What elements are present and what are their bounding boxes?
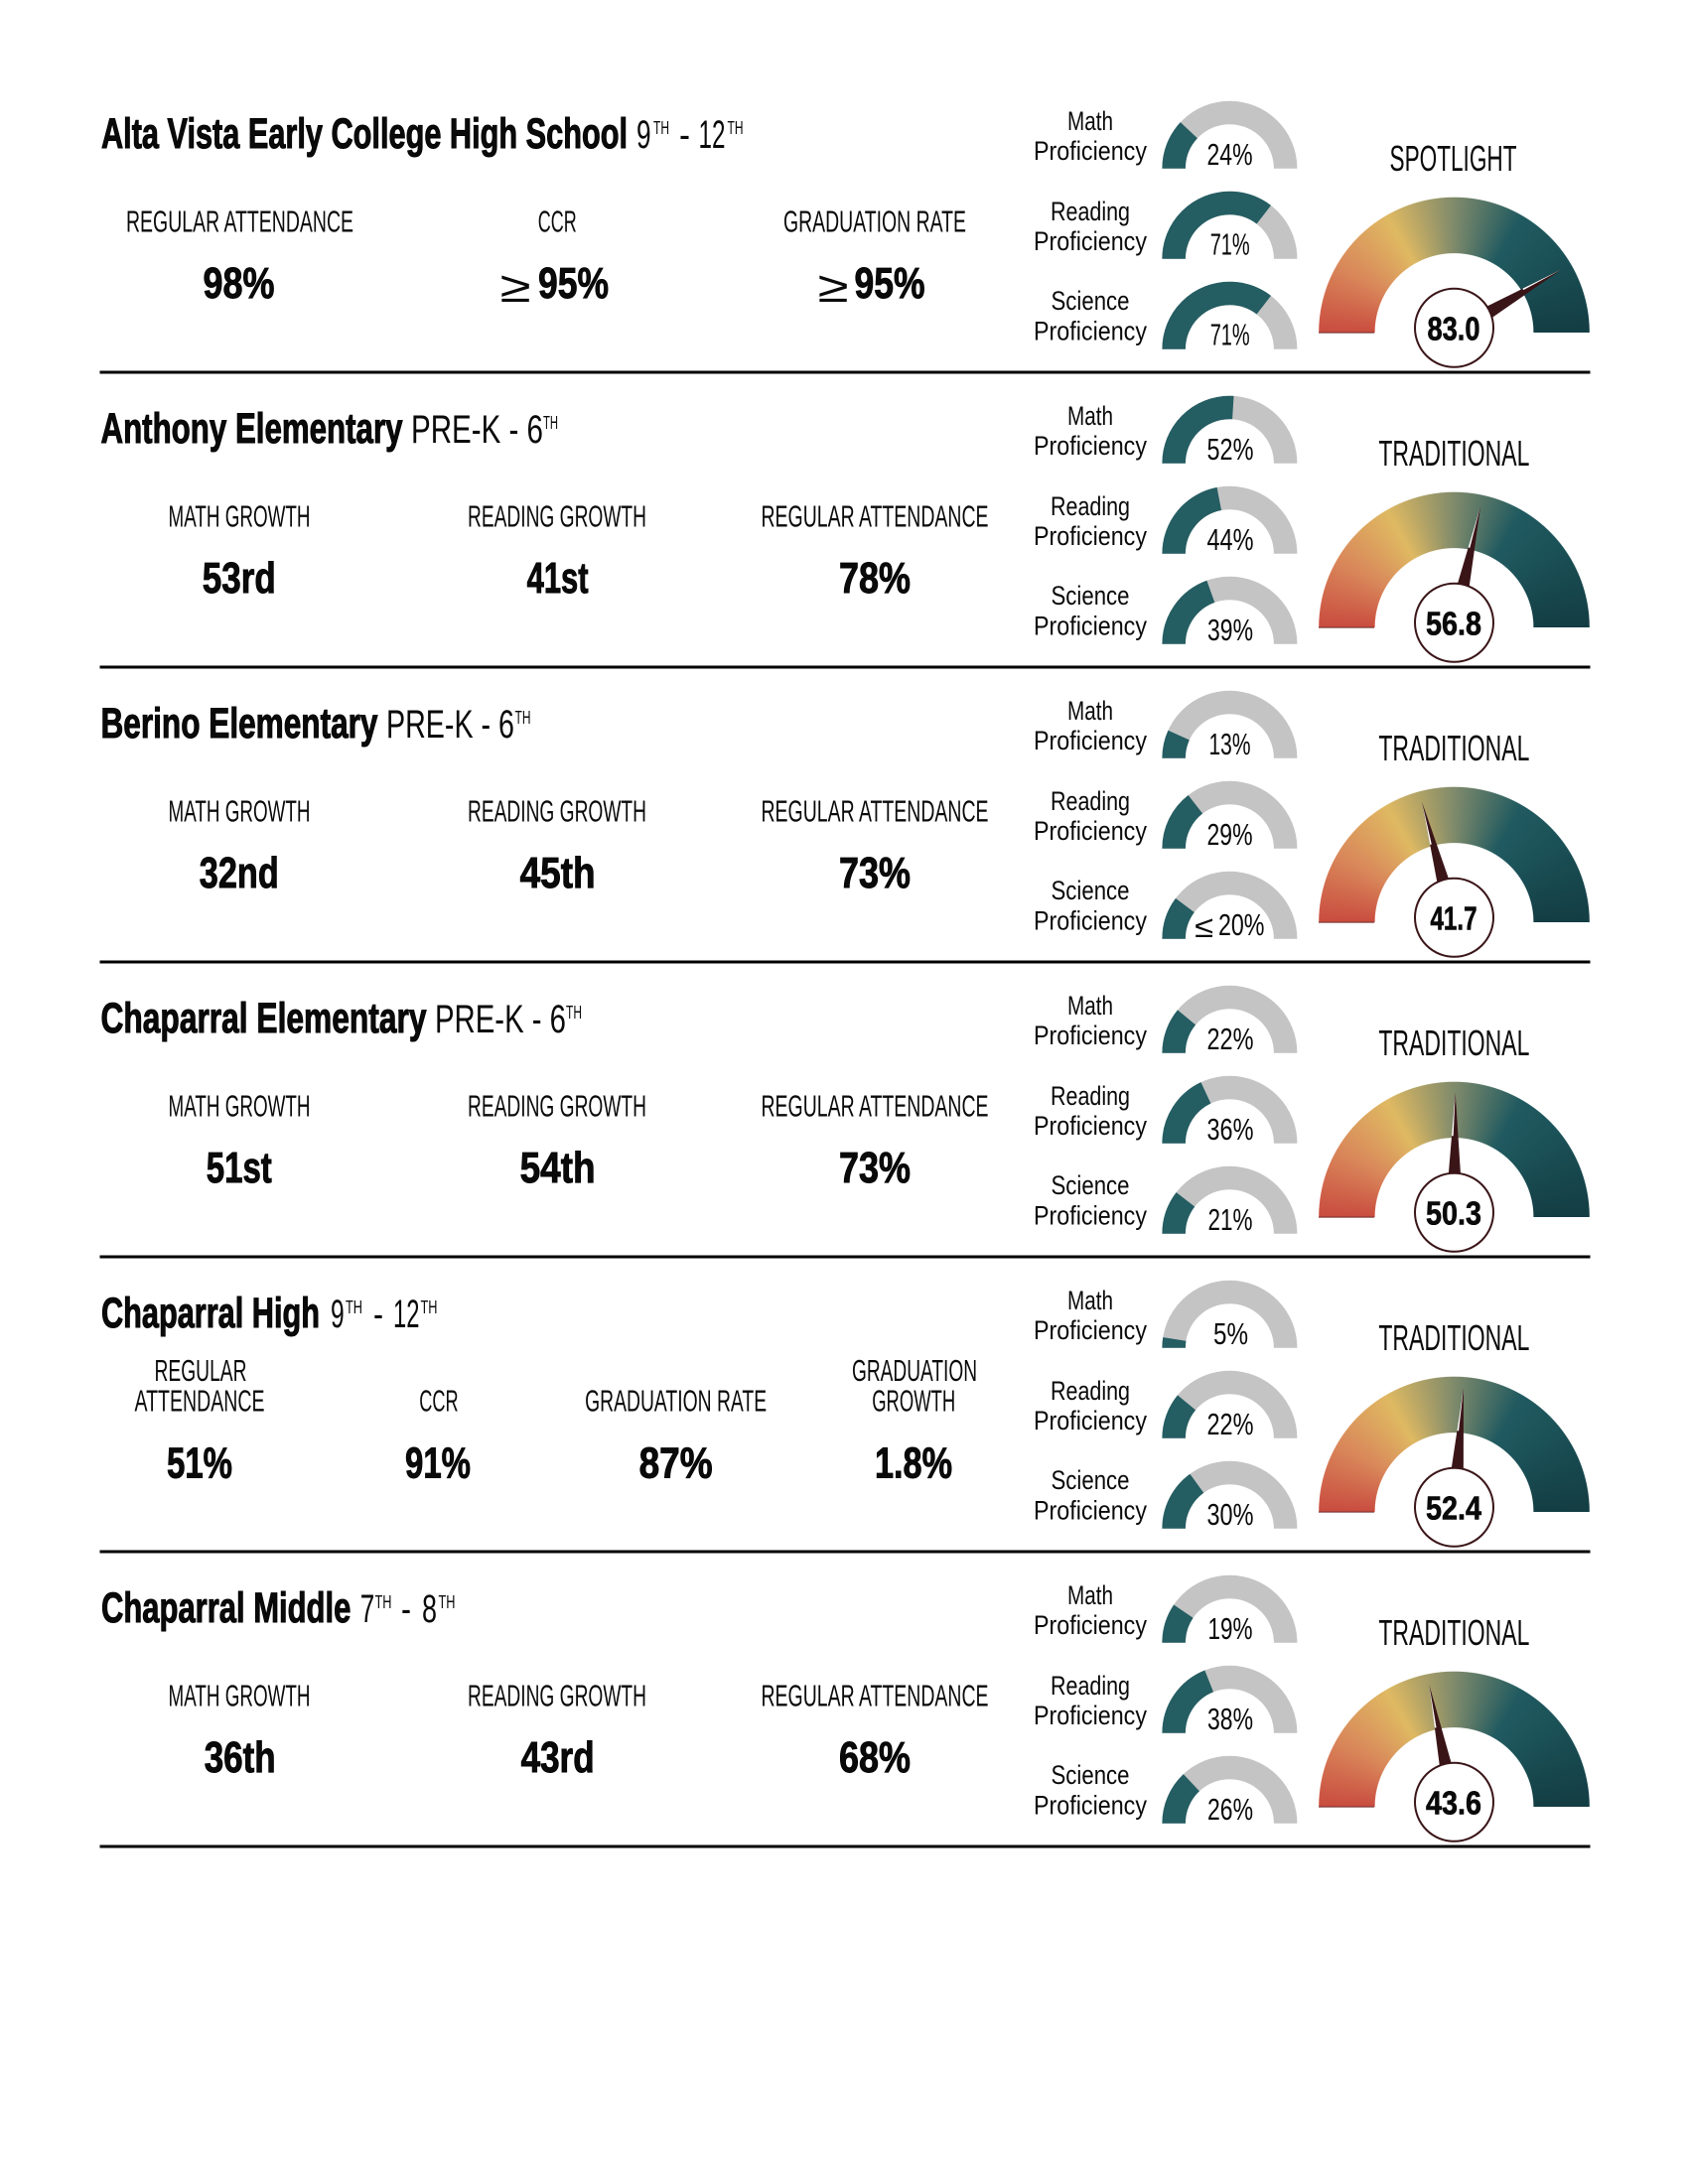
needle xyxy=(1483,264,1565,320)
metric: reading growth xyxy=(468,1089,646,1192)
metric: regular attendance: ATTENDANCE xyxy=(135,1384,264,1419)
label: reading proficiency: Proficiency xyxy=(1034,521,1148,551)
metric: math growth: MATH GROWTH xyxy=(169,1089,310,1124)
mini gauge: math 22% xyxy=(1174,997,1286,1056)
label: reading proficiency xyxy=(1034,197,1148,256)
label: math proficiency: Proficiency xyxy=(1034,431,1148,461)
label: reading proficiency xyxy=(1034,1671,1148,1730)
metric: regular attendance: 78% xyxy=(839,554,911,603)
label: reading proficiency xyxy=(1034,1376,1148,1435)
heading: school name and grades: TH xyxy=(566,1003,582,1023)
mini gauge: science at most 20% xyxy=(1174,883,1286,944)
label: math proficiency: Proficiency xyxy=(1034,136,1148,166)
metric: graduation growth: 1.8% xyxy=(875,1438,952,1487)
heading: school name and grades: TH xyxy=(653,118,669,138)
metric: math growth: MATH GROWTH xyxy=(169,1679,310,1713)
metric: reading growth: 54th xyxy=(520,1144,596,1192)
label: science proficiency: Proficiency xyxy=(1034,1496,1148,1526)
heading: school name and grades: PRE-K - 6 xyxy=(386,703,514,747)
mini gauge: reading 36% xyxy=(1174,1087,1286,1147)
mini gauge: reading 22%: 22% xyxy=(1207,1407,1253,1441)
heading: school name and grades: TH xyxy=(421,1297,437,1317)
score gauge arc xyxy=(1319,1081,1590,1217)
heading: school name and grades: TH xyxy=(543,413,558,433)
metric: CCR xyxy=(405,1384,471,1487)
label: math proficiency: Math xyxy=(1067,401,1113,431)
metric: CCR: 91% xyxy=(405,1438,471,1487)
metric: regular attendance xyxy=(761,794,989,897)
label: reading proficiency: Reading xyxy=(1051,1376,1130,1406)
metric: CCR: CCR xyxy=(419,1384,459,1419)
label: reading proficiency: Proficiency xyxy=(1034,226,1148,256)
metric: graduation rate xyxy=(585,1384,767,1487)
mini gauge: reading 44%: 44% xyxy=(1207,522,1253,557)
metric: regular attendance: 68% xyxy=(839,1733,911,1782)
mini gauge: science 71% xyxy=(1174,293,1286,351)
score circle 43.6: 43.6 xyxy=(1426,1785,1481,1821)
heading: school name and grades: TH xyxy=(439,1592,455,1612)
metric: math growth xyxy=(169,1089,310,1192)
label: math proficiency: Math xyxy=(1067,696,1113,726)
score circle 56.8: 56.8 xyxy=(1426,606,1481,641)
mini gauge: science at most 20%: 20% xyxy=(1218,907,1264,942)
label: math proficiency xyxy=(1034,696,1148,755)
metric: graduation growth xyxy=(852,1353,977,1487)
score gauge arc xyxy=(1319,1671,1590,1807)
metric: regular attendance: 98% xyxy=(203,259,274,308)
metric: reading growth xyxy=(468,794,646,897)
panel: Chaparral Elementary xyxy=(99,991,1591,1259)
score circle 50.3: 50.3 xyxy=(1426,1195,1481,1231)
heading: school name and grades: - xyxy=(401,1587,411,1631)
heading: school name and grades: 12 xyxy=(393,1293,419,1336)
metric: graduation growth: GROWTH xyxy=(872,1384,955,1419)
label: reading proficiency: Proficiency xyxy=(1034,816,1148,846)
infographic page xyxy=(99,101,1591,1848)
mini gauge: math 24% xyxy=(1174,112,1286,172)
metric: regular attendance xyxy=(761,1679,989,1782)
label: science proficiency xyxy=(1034,876,1148,936)
heading: school name and grades: Chaparral Elementary xyxy=(101,996,427,1042)
metric: reading growth: 43rd xyxy=(521,1733,595,1782)
label: reading proficiency: Proficiency xyxy=(1034,1701,1148,1730)
metric: math growth: MATH GROWTH xyxy=(169,499,310,534)
metric: regular attendance xyxy=(761,1089,989,1192)
label: science proficiency xyxy=(1034,1465,1148,1526)
metric: CCR: CCR xyxy=(538,205,577,239)
score gauge arc xyxy=(1319,491,1590,627)
mini gauge: reading 36%: 36% xyxy=(1207,1112,1253,1147)
metric: CCR xyxy=(500,205,609,312)
label: science proficiency: Science xyxy=(1051,286,1130,316)
metric: regular attendance: REGULAR ATTENDANCE xyxy=(126,205,353,239)
label: reading proficiency: Reading xyxy=(1051,786,1130,816)
metric: regular attendance: REGULAR ATTENDANCE xyxy=(761,1089,989,1124)
mini gauge: math 13%: 13% xyxy=(1209,727,1251,761)
heading: school name and grades: TH xyxy=(727,118,743,138)
needle xyxy=(1423,1684,1453,1771)
mini gauge: math 19%: 19% xyxy=(1207,1611,1253,1646)
heading: school name and grades: - xyxy=(373,1293,383,1336)
metric: math growth xyxy=(169,794,310,897)
label: science proficiency: Proficiency xyxy=(1034,1201,1148,1231)
label: science proficiency: Proficiency xyxy=(1034,317,1148,346)
heading: school name and grades: 12 xyxy=(699,113,725,157)
label: math proficiency xyxy=(1034,991,1148,1050)
panel: Anthony Elementary xyxy=(99,401,1591,669)
label: math proficiency: Math xyxy=(1067,106,1113,136)
score circle 41.7: 41.7 xyxy=(1430,899,1477,937)
label: reading proficiency: Reading xyxy=(1051,491,1130,521)
label: science proficiency: Science xyxy=(1051,1170,1130,1200)
mini gauge: reading 44% xyxy=(1174,497,1286,557)
metric: math growth xyxy=(169,499,310,603)
metric: regular attendance: 73% xyxy=(839,849,911,897)
score gauge arc xyxy=(1319,197,1590,333)
label: science proficiency: Science xyxy=(1051,1465,1130,1495)
mini gauge: math 5% xyxy=(1174,1292,1286,1351)
label: reading proficiency xyxy=(1034,1081,1148,1141)
mini gauge: math 22%: 22% xyxy=(1207,1022,1253,1056)
panel: Alta Vista Early College High School xyxy=(99,106,1591,373)
label: reading proficiency: Reading xyxy=(1051,1081,1130,1111)
label: math proficiency: Math xyxy=(1067,1580,1113,1610)
metric: regular attendance: 73% xyxy=(839,1144,911,1192)
heading: school name and grades: 9 xyxy=(331,1293,345,1336)
heading: school name and grades: 9 xyxy=(636,113,651,157)
needle xyxy=(1416,800,1451,887)
mini gauge: reading 71% xyxy=(1174,203,1286,262)
mini gauge: science 39% xyxy=(1174,588,1286,647)
heading: school name and grades: TH xyxy=(375,1592,391,1612)
metric: regular attendance: REGULAR xyxy=(155,1353,246,1388)
label: science proficiency: Science xyxy=(1051,876,1130,905)
label: math proficiency xyxy=(1034,106,1148,166)
mini gauge: reading 22% xyxy=(1174,1382,1286,1441)
score circle 52.4: 52.4 xyxy=(1426,1489,1482,1527)
label: math proficiency: Proficiency xyxy=(1034,726,1148,755)
metric: reading growth: 41st xyxy=(527,554,589,603)
metric: graduation growth: GRADUATION xyxy=(852,1353,977,1388)
label: science proficiency xyxy=(1034,1170,1148,1231)
score circle 56.8 xyxy=(1415,584,1493,662)
needle xyxy=(1451,1387,1470,1475)
mini gauge: reading 29% xyxy=(1174,792,1286,852)
category heading: TRADITIONAL xyxy=(1378,728,1529,768)
panel: Berino Elementary xyxy=(99,696,1591,963)
mini gauge: math 5%: 5% xyxy=(1213,1316,1248,1351)
metric: regular attendance: REGULAR ATTENDANCE xyxy=(761,1679,989,1713)
category heading: TRADITIONAL xyxy=(1378,1612,1529,1653)
heading: school name and grades: 8 xyxy=(422,1587,437,1631)
mini gauge: reading 38%: 38% xyxy=(1207,1702,1253,1736)
needle xyxy=(1448,1093,1462,1179)
metric: math growth: 51st xyxy=(207,1144,272,1192)
label: reading proficiency: Proficiency xyxy=(1034,1111,1148,1141)
category heading: TRADITIONAL xyxy=(1378,1023,1529,1063)
mini gauge: math 13% xyxy=(1174,702,1286,761)
heading: school name and grades: Alta Vista Early College High School xyxy=(101,111,628,158)
heading: school name and grades: PRE-K - 6 xyxy=(435,998,566,1041)
mini gauge: reading 29%: 29% xyxy=(1207,817,1253,852)
label: science proficiency: Science xyxy=(1051,1760,1130,1790)
metric: regular attendance: 51% xyxy=(167,1438,232,1487)
metric: graduation rate: 87% xyxy=(639,1438,713,1487)
mini gauge: science 30% xyxy=(1174,1472,1286,1532)
metric: regular attendance xyxy=(135,1353,264,1487)
metric: reading growth xyxy=(468,1679,646,1782)
heading: school name and grades: 7 xyxy=(360,1587,374,1631)
metric: regular attendance xyxy=(126,205,353,308)
metric: math growth: 36th xyxy=(205,1733,276,1782)
mini gauge: math 52%: 52% xyxy=(1207,432,1253,467)
label: reading proficiency xyxy=(1034,491,1148,551)
heading: school name and grades: TH xyxy=(514,708,530,728)
label: math proficiency xyxy=(1034,1580,1148,1640)
metric: graduation rate: ≥ xyxy=(818,263,848,312)
mini gauge: science 30%: 30% xyxy=(1207,1497,1253,1532)
metric: graduation rate: 95% xyxy=(854,259,925,308)
label: math proficiency xyxy=(1034,1286,1148,1345)
metric: math growth xyxy=(169,1679,310,1782)
mini gauge: science 21%: 21% xyxy=(1207,1202,1253,1237)
mini gauge: reading 38% xyxy=(1174,1677,1286,1736)
score circle 50.3 xyxy=(1415,1173,1493,1252)
metric: reading growth: READING GROWTH xyxy=(468,794,646,829)
score gauge arc xyxy=(1319,786,1590,922)
metric: reading growth: READING GROWTH xyxy=(468,499,646,534)
mini gauge: science 26% xyxy=(1174,1767,1286,1827)
needle xyxy=(1456,504,1487,593)
label: science proficiency: Proficiency xyxy=(1034,612,1148,641)
label: math proficiency xyxy=(1034,401,1148,461)
label: science proficiency: Science xyxy=(1051,581,1130,611)
mini gauge: science 71%: 71% xyxy=(1210,318,1250,351)
mini gauge: math 52% xyxy=(1174,407,1286,467)
label: science proficiency: Proficiency xyxy=(1034,906,1148,936)
label: science proficiency xyxy=(1034,581,1148,641)
metric: graduation rate: GRADUATION RATE xyxy=(585,1384,767,1419)
metric: math growth: 32nd xyxy=(200,849,279,897)
metric: graduation rate xyxy=(783,205,966,312)
label: science proficiency xyxy=(1034,286,1148,346)
score gauge arc xyxy=(1319,1376,1590,1512)
label: math proficiency: Proficiency xyxy=(1034,1021,1148,1050)
panel: Chaparral Middle xyxy=(99,1580,1591,1848)
mini gauge: science 26%: 26% xyxy=(1207,1792,1253,1827)
heading: school name and grades: Chaparral Middle xyxy=(101,1585,351,1632)
heading: school name and grades: Chaparral High xyxy=(101,1291,320,1337)
mini gauge: math 24%: 24% xyxy=(1207,137,1253,172)
score circle 83.0 xyxy=(1415,289,1493,367)
panel: Chaparral High xyxy=(99,1286,1591,1553)
metric: CCR: ≥ xyxy=(500,263,530,312)
mini gauge: science 21% xyxy=(1174,1177,1286,1237)
mini gauge: reading 71%: 71% xyxy=(1210,226,1250,262)
category heading: TRADITIONAL xyxy=(1378,433,1529,474)
metric: regular attendance xyxy=(761,499,989,603)
label: math proficiency: Proficiency xyxy=(1034,1610,1148,1640)
metric: reading growth: READING GROWTH xyxy=(468,1089,646,1124)
metric: reading growth xyxy=(468,499,646,603)
heading: school name and grades: - xyxy=(679,113,690,157)
label: math proficiency: Math xyxy=(1067,991,1113,1021)
score circle 83.0: 83.0 xyxy=(1428,310,1479,347)
heading: school name and grades: PRE-K - 6 xyxy=(411,408,543,452)
heading: school name and grades: TH xyxy=(346,1297,362,1317)
mini gauge: science 39%: 39% xyxy=(1207,613,1253,647)
heading: school name and grades: Berino Elementary xyxy=(101,701,378,748)
label: reading proficiency: Reading xyxy=(1051,1671,1130,1701)
label: math proficiency: Math xyxy=(1067,1286,1113,1315)
category heading: TRADITIONAL xyxy=(1378,1317,1529,1358)
label: science proficiency: Proficiency xyxy=(1034,1791,1148,1821)
metric: CCR: 95% xyxy=(538,259,609,308)
score circle 41.7 xyxy=(1415,879,1493,957)
metric: regular attendance: REGULAR ATTENDANCE xyxy=(761,499,989,534)
score circle 43.6 xyxy=(1415,1763,1493,1842)
heading: school name and grades: Anthony Elementary xyxy=(101,406,403,453)
label: math proficiency: Proficiency xyxy=(1034,1315,1148,1345)
mini gauge: math 19% xyxy=(1174,1586,1286,1646)
metric: math growth: 53rd xyxy=(203,554,276,603)
metric: reading growth: 45th xyxy=(520,849,596,897)
metric: regular attendance: REGULAR ATTENDANCE xyxy=(761,794,989,829)
score circle 52.4 xyxy=(1415,1468,1493,1547)
metric: graduation rate: GRADUATION RATE xyxy=(783,205,966,239)
category heading: SPOTLIGHT xyxy=(1390,138,1517,179)
label: science proficiency xyxy=(1034,1760,1148,1821)
label: reading proficiency: Reading xyxy=(1051,197,1130,226)
mini gauge: science at most 20%: ≤ xyxy=(1195,909,1213,944)
label: reading proficiency: Proficiency xyxy=(1034,1406,1148,1435)
metric: reading growth: READING GROWTH xyxy=(468,1679,646,1713)
label: reading proficiency xyxy=(1034,786,1148,846)
metric: math growth: MATH GROWTH xyxy=(169,794,310,829)
